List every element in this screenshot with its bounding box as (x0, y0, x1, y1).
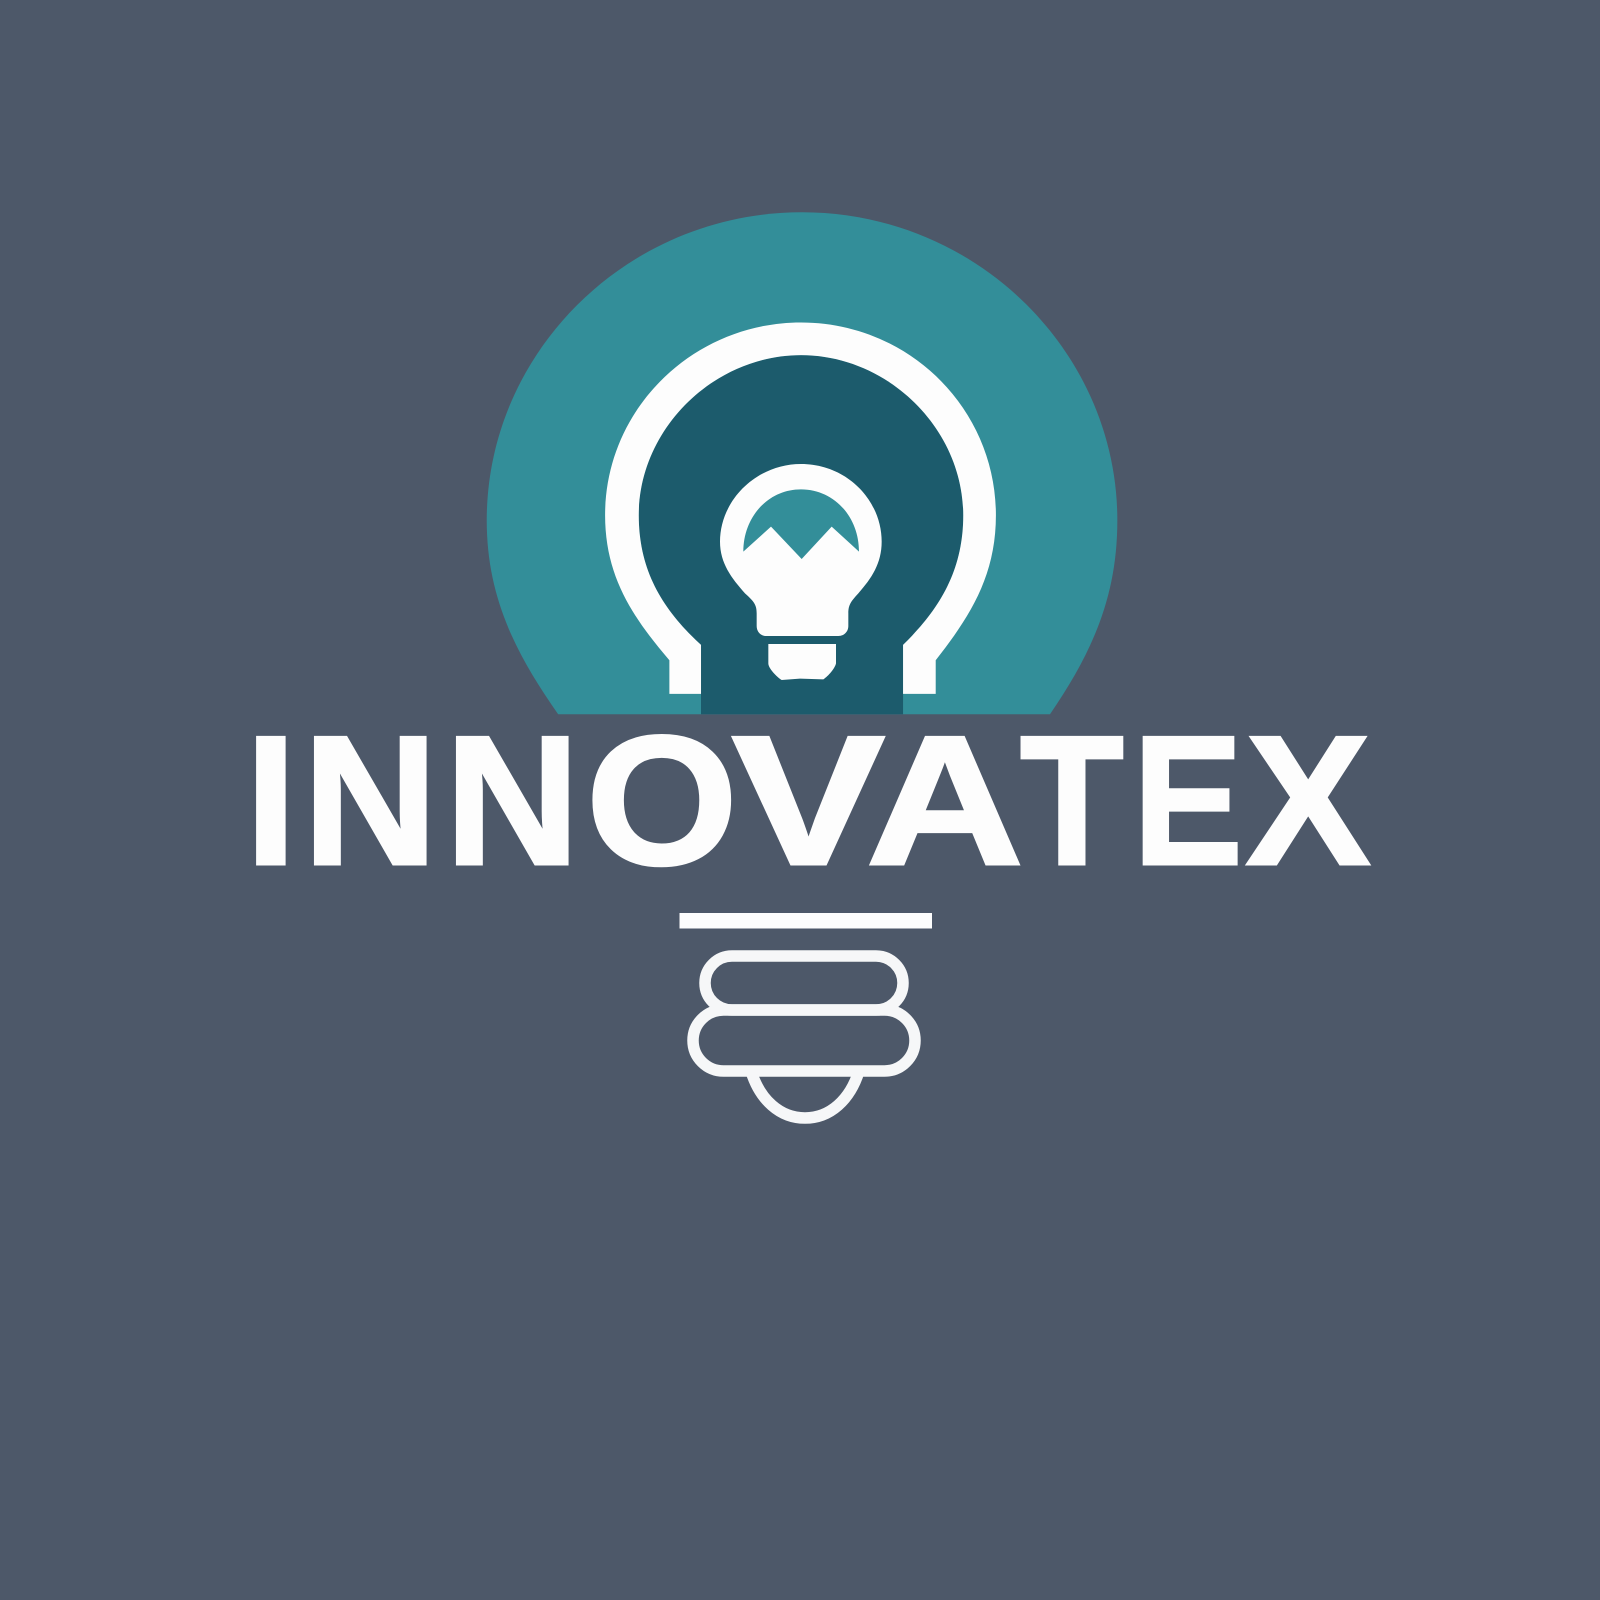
wordmark: INNOVATEX: V (732, 697, 885, 903)
icon: bulb socket (693, 956, 915, 1118)
wordmark: INNOVATEX: T (1020, 697, 1124, 903)
socket dome tip (751, 1071, 859, 1118)
wordmark: INNOVATEX: A (866, 697, 1023, 903)
small bulb body (720, 464, 882, 636)
wordmark: INNOVATEX: N (445, 697, 580, 903)
wordmark: INNOVATEX: N (303, 697, 438, 903)
icon: small light bulb (720, 464, 882, 680)
divider bar under the wordmark (680, 913, 932, 928)
wordmark: INNOVATEX: E (1133, 697, 1243, 903)
white bulb outline ring (605, 322, 996, 694)
wordmark: INNOVATEX: O (586, 697, 738, 903)
wordmark: INNOVATEX: I (245, 697, 296, 903)
teal dome background (487, 212, 1117, 714)
wordmark: INNOVATEX (245, 697, 1372, 903)
dark teal bulb interior (639, 355, 963, 714)
socket upper pill (705, 956, 903, 1010)
small bulb teal highlight (743, 489, 859, 559)
socket lower pill (693, 1010, 915, 1071)
small bulb base (768, 644, 836, 680)
wordmark: INNOVATEX: X (1246, 697, 1370, 903)
